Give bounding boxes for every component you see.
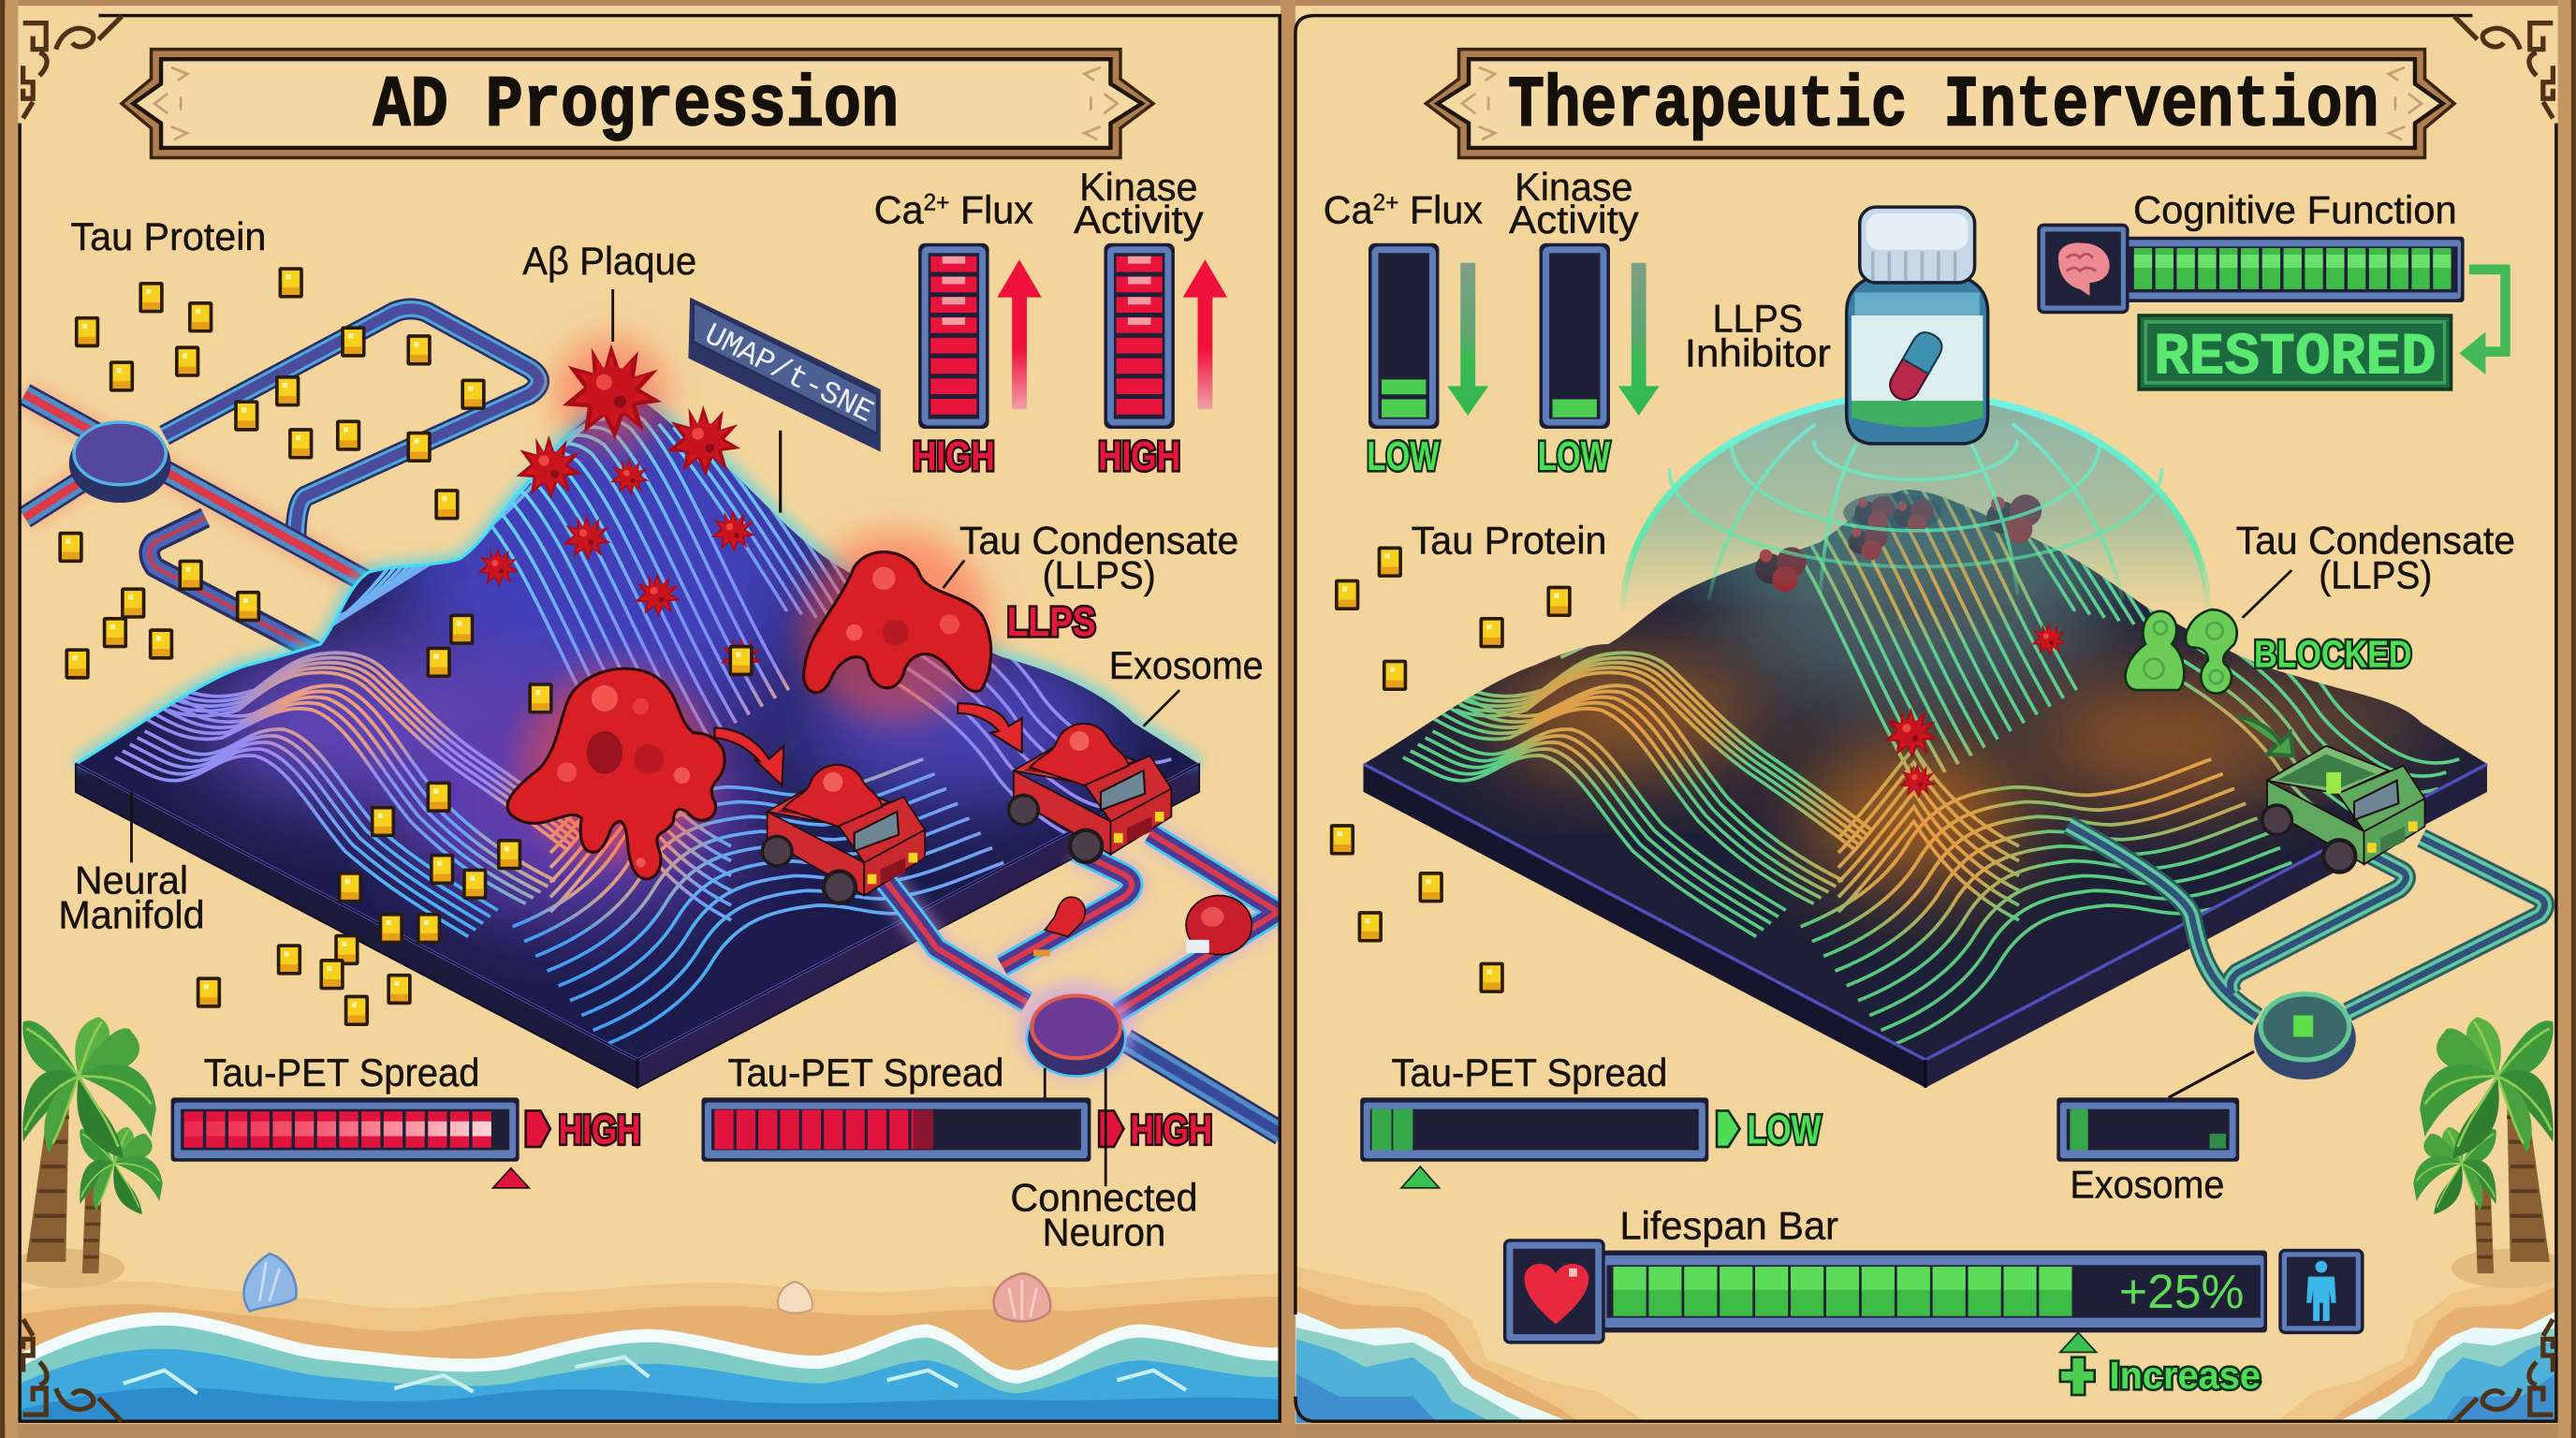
gauge: Ca2+ flux high: Ca — [874, 189, 924, 232]
gauge: Ca2+ flux high: Flux — [950, 189, 1033, 232]
gauge: Ca2+ flux low — [1324, 189, 1488, 479]
panel: AD Progression — [7, 50, 1281, 1423]
sign: UMAP/t-SNE: UMAP/t-SNE — [698, 317, 879, 432]
node: treated neuron — [2254, 994, 2356, 1079]
label: Exosome — [1109, 643, 1264, 726]
gauge: kinase activity low: Kinase — [1515, 165, 1633, 209]
panel: Therapeutic Intervention — [1296, 50, 2569, 1423]
gauge: lifespan bar: Increase — [2110, 1354, 2261, 1397]
icon: LLPS inhibitor bottle — [1847, 207, 1988, 444]
icon: tau condensate blob, upper — [804, 552, 991, 693]
gauge: Ca2+ flux low: 2+ — [1373, 191, 1399, 216]
label: Connected Neuron — [1010, 1068, 1197, 1254]
node: upper left neuron — [69, 422, 171, 503]
label: Tau Condensate (LLPS): (LLPS) — [2319, 552, 2432, 596]
tag: LLPS red: LLPS — [1007, 599, 1096, 645]
title: Therapeutic Intervention: Therapeutic Intervention — [1508, 66, 2378, 147]
gauge: Tau-PET spread high, first: HIGH — [559, 1107, 641, 1152]
label: Neural Manifold: Neural — [75, 858, 188, 902]
gauge: Tau-PET spread high, second: HIGH — [1131, 1107, 1212, 1152]
gauge: exosome level — [2056, 1051, 2254, 1206]
gauge: kinase activity low: LOW — [1538, 433, 1610, 479]
label: Tau Condensate (LLPS) — [2236, 518, 2515, 618]
label: Neural Manifold: Manifold — [58, 893, 205, 937]
icon: brain — [2058, 242, 2110, 296]
gauge: kinase activity high: Kinase — [1079, 165, 1197, 209]
icon: heart — [1505, 1240, 1603, 1343]
gauge: Tau-PET spread low: Tau-PET Spread — [1392, 1050, 1667, 1094]
icon: person — [2280, 1251, 2363, 1332]
gauge: Ca2+ flux low: LOW — [1367, 433, 1440, 479]
sign: UMAP/t-SNE — [688, 298, 881, 513]
tag: BLOCKED: BLOCKED — [2254, 633, 2411, 676]
beach corners — [1296, 1267, 2556, 1423]
gauge: cognitive function restored — [2039, 188, 2505, 390]
gauge: Tau-PET spread high, second: Tau-PET Spread — [728, 1050, 1003, 1094]
label: Tau Condensate (LLPS): (LLPS) — [1043, 552, 1156, 596]
decorative connector tubes: upper left — [24, 309, 539, 654]
icon: tau condensate blob, large — [507, 668, 724, 879]
icon: blocked green condensate — [2126, 609, 2237, 694]
gauge: Tau-PET spread low: LOW — [1748, 1107, 1822, 1152]
decorative connector tubes: lower right — [884, 833, 1281, 1134]
icon: green exosome truck — [2261, 746, 2424, 874]
gauge: Ca2+ flux high: 2+ — [924, 191, 950, 216]
label: LLPS Inhibitor: Inhibitor — [1685, 330, 1831, 374]
shield dome — [1623, 394, 2208, 611]
gauge: lifespan bar — [1505, 1203, 2363, 1397]
icon: amyloid beta plaques — [477, 344, 762, 678]
label: Tau Protein: Tau Protein — [71, 214, 266, 258]
gauge: kinase activity high: Activity — [1074, 198, 1204, 242]
gauge: kinase activity low — [1509, 165, 1660, 479]
icon: tau protein coins, few — [1330, 547, 1572, 993]
label: Neural Manifold — [58, 792, 205, 937]
label: Exosome: Exosome — [1109, 643, 1264, 687]
gauge: Tau-PET spread high, second — [701, 1050, 1212, 1162]
label: Connected Neuron: Connected — [1010, 1175, 1197, 1219]
beach and ocean — [20, 1273, 1281, 1423]
gauge: kinase activity low: Activity — [1509, 198, 1639, 242]
arrow: green to truck — [2237, 716, 2293, 756]
gauge: kinase activity high — [1074, 165, 1227, 479]
icon: palm trees right — [2413, 1017, 2569, 1288]
gauge: Tau-PET spread high, first — [171, 1050, 641, 1188]
gauge: Tau-PET spread high, first: Tau-PET Spread — [204, 1050, 480, 1094]
arrows: blob to truck — [714, 703, 1022, 785]
gauge: Ca2+ flux low: Ca — [1324, 189, 1373, 232]
icon: tau protein coins — [58, 267, 754, 1026]
manifold terrain, treated — [1363, 490, 2555, 1088]
label: Tau Protein: Tau Protein — [1412, 518, 1606, 562]
label: LLPS Inhibitor: LLPS — [1713, 297, 1803, 341]
gauge: Tau-PET spread low — [1360, 1050, 1822, 1188]
label: Abeta Plaque: Aβ Plaque — [522, 239, 696, 283]
icon: palm trees left — [7, 1017, 163, 1288]
gauge: kinase activity high: HIGH — [1098, 433, 1180, 479]
label: Tau Condensate (LLPS): Tau Condensate — [2236, 518, 2515, 562]
gauge: lifespan bar: Lifespan Bar — [1620, 1203, 1838, 1247]
red glow — [520, 339, 990, 859]
banner: AD Progression — [122, 50, 1153, 157]
label: LLPS Inhibitor — [1685, 297, 1831, 374]
gauge: Ca2+ flux high — [874, 189, 1042, 479]
neural manifold terrain — [66, 370, 1216, 1088]
gauge: Ca2+ flux high: HIGH — [913, 433, 995, 479]
icon: exosome trucks with condensate — [761, 724, 1171, 905]
gauge: lifespan bar: +25% — [2119, 1265, 2244, 1318]
icon: seashells — [244, 1254, 1050, 1322]
gauge: cognitive function restored: RESTORED — [2154, 323, 2437, 390]
icon: small plaques under dome — [1755, 493, 2067, 799]
node: connected neuron — [1017, 981, 1135, 1079]
decorative treated tubes — [2069, 825, 2545, 1017]
vesicles on axons — [1033, 895, 1251, 956]
label: Connected Neuron: Neuron — [1043, 1210, 1165, 1254]
gauge: exosome level: Exosome — [2070, 1162, 2224, 1206]
label: Tau Condensate (LLPS) — [943, 518, 1238, 596]
gauge: cognitive function restored: Cognitive Function — [2133, 188, 2457, 232]
banner: Therapeutic Intervention — [1426, 50, 2454, 157]
title: AD Progression: AD Progression — [373, 66, 899, 147]
gauge: Ca2+ flux low: Flux — [1399, 189, 1483, 232]
label: Tau Condensate (LLPS): Tau Condensate — [959, 518, 1238, 562]
